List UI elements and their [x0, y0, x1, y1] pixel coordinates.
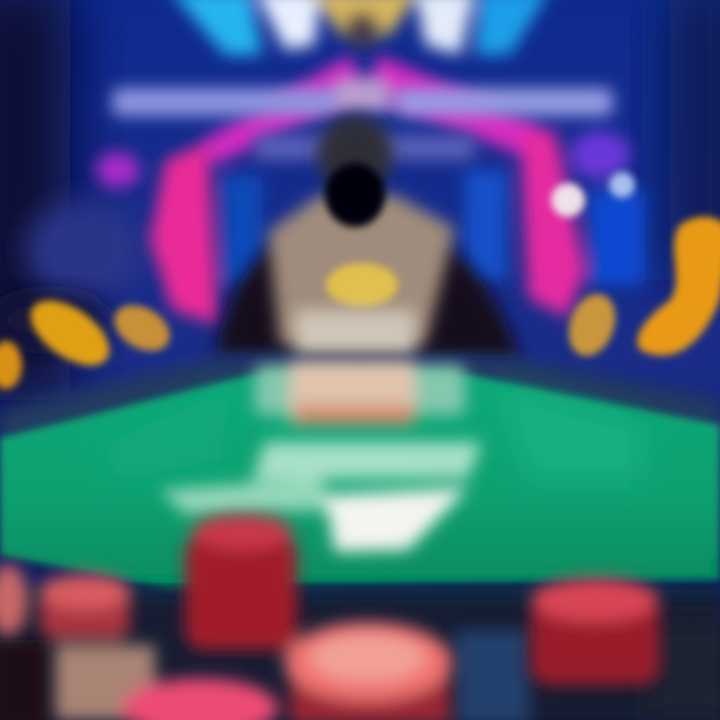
gold emblem: [326, 263, 398, 307]
figure head: [317, 115, 393, 195]
scattered cards: [160, 442, 482, 552]
banner text band: [112, 78, 613, 160]
gold shapes: [0, 172, 720, 389]
figure torso: [268, 195, 455, 345]
figure: [215, 115, 520, 358]
pink arch: [96, 55, 645, 325]
stack of chips and cards centre: [255, 360, 465, 425]
figure face: [325, 163, 385, 227]
chip stack tall: [185, 535, 297, 650]
red chip stacks: [0, 514, 660, 720]
table rim: [0, 358, 720, 450]
foreground dark floor: [0, 602, 720, 720]
chip stack front left: [122, 678, 278, 720]
poker table: [0, 375, 720, 590]
chip stack left: [40, 585, 130, 640]
figure shoulders: [215, 240, 520, 358]
chip stack front centre: [290, 670, 450, 720]
chip far left: [0, 564, 28, 636]
pale shirt: [295, 310, 415, 355]
table front edge: [0, 588, 720, 606]
felt highlights: [100, 390, 640, 480]
chip stack right: [530, 600, 660, 685]
spotlights: [170, 0, 550, 55]
